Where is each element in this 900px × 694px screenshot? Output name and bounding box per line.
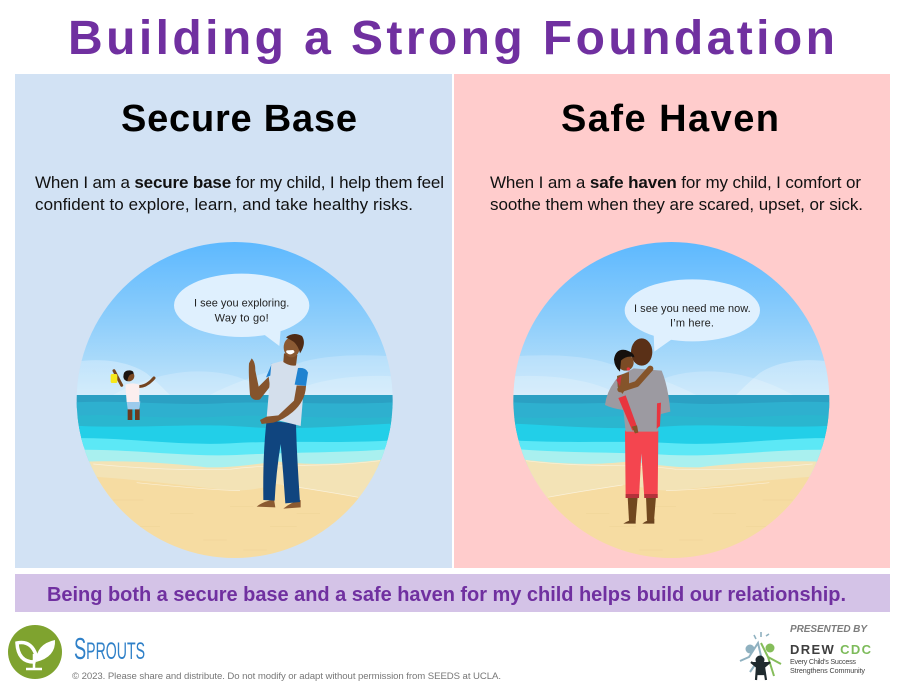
speech bubble xyxy=(174,274,309,346)
text: safe haven description xyxy=(490,173,863,214)
speech bubble: I’m here. xyxy=(670,318,714,330)
speech bubble: Way to go! xyxy=(215,313,269,325)
logo: drew cdc: Every Child’s Success xyxy=(790,657,856,666)
text: safe haven description: When I am a safe haven for my child, I comfort or xyxy=(490,173,861,192)
illustration: parent comforting child at the beach xyxy=(506,240,836,570)
logo: sprouts: SPROUTS xyxy=(74,631,145,666)
speech bubble: I see you need me now. xyxy=(634,303,751,315)
title: Building a Strong Foundation xyxy=(68,12,835,65)
banner: key message: Being both a secure base and a safe haven for my child helps build our relationship. xyxy=(47,584,846,606)
speech bubble xyxy=(625,279,760,352)
icon: child with bucket xyxy=(111,370,154,420)
icon: drew cdc family xyxy=(740,632,781,680)
banner: key message xyxy=(15,574,890,612)
icon: waving father xyxy=(249,334,308,509)
speech bubble: I see you exploring. xyxy=(194,298,289,310)
panel: secure base xyxy=(15,74,452,570)
logo: drew cdc: DREW CDC xyxy=(790,642,872,657)
heading: secure base: Secure Base xyxy=(121,98,357,140)
text: secure base description: When I am a secure base for my child, I help them feel xyxy=(35,173,444,192)
copyright notice: © 2023. Please share and distribute. Do not modify or adapt without permission from SEEDS at UCLA. xyxy=(72,671,501,682)
icon: father holding child xyxy=(605,338,670,524)
logo: sprouts xyxy=(8,625,145,679)
logo: drew cdc: PRESENTED BY xyxy=(790,624,868,635)
text: safe haven description: soothe them when they are scared, upset, or sick. xyxy=(490,195,863,214)
illustration: parent watching child explore at the beach xyxy=(70,240,400,570)
panel: safe haven xyxy=(454,74,890,570)
text: secure base description xyxy=(35,173,444,214)
text: secure base description: confident to explore, learn, and take healthy risks. xyxy=(35,195,413,214)
heading: safe haven: Safe Haven xyxy=(561,98,779,140)
logo: drew cdc: Strengthens Community xyxy=(790,666,865,675)
logo: drew cdc xyxy=(740,624,872,680)
